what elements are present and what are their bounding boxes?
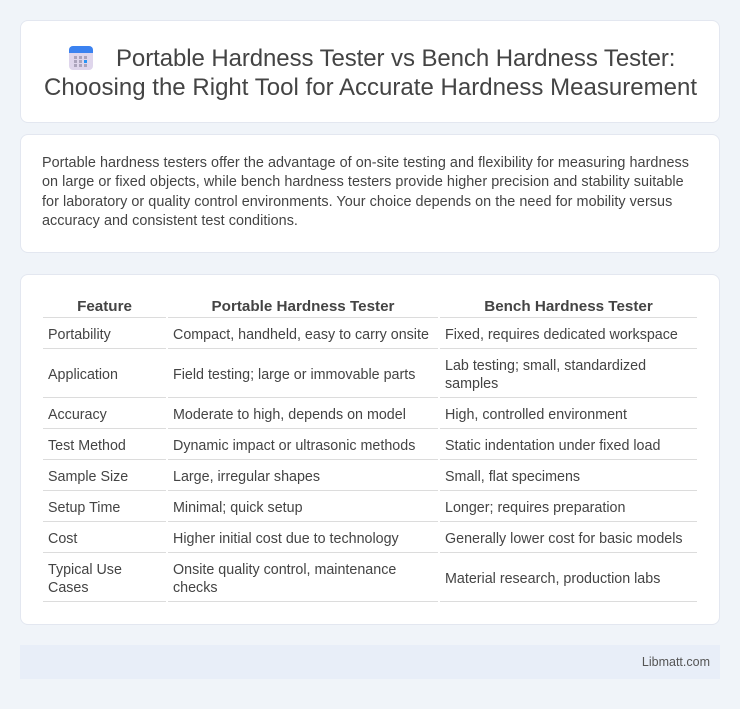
heading: Portable Hardness Tester vs Bench Hardness Tester: [116,45,675,72]
footer source text: Libmatt.com [642,655,710,669]
table: feature comparison: Sample Size [48,469,128,485]
table: feature comparison: Portability [48,327,111,343]
table: feature comparison: Application [48,367,118,383]
table: feature comparison: Cost [48,531,77,547]
table: feature comparison: Small, flat specimens [445,469,580,485]
table: feature comparison: Lab testing; small, standardized [445,358,646,374]
table: feature comparison: Minimal; quick setup [173,500,303,516]
table: feature comparison: Large, irregular shapes [173,469,320,485]
table: feature comparison: Dynamic impact or ultrasonic methods [173,438,415,454]
icon: calendar [69,46,93,70]
table: feature comparison: Feature [77,298,132,314]
table: feature comparison: Onsite quality control, maintenance [173,562,396,578]
text block: summary: Portable hardness testers offer the advantage of on-site testing and flexibility for measuring hardness [42,155,689,171]
footer bar [20,645,720,679]
table: feature comparison: Generally lower cost for basic models [445,531,683,547]
table: feature comparison: Compact, handheld, easy to carry onsite [173,327,429,343]
heading: Choosing the Right Tool for Accurate Hardness Measurement [44,74,697,101]
text block: summary: on large or fixed objects, while bench hardness testers provide higher precision and stability suitable [42,174,684,190]
table: feature comparison: Moderate to high, depends on model [173,407,406,423]
table: feature comparison: Accuracy [48,407,107,423]
table: feature comparison: Test Method [48,438,126,454]
table: feature comparison: Longer; requires preparation [445,500,625,516]
text block: summary: for laboratory or quality control environments. Your choice depends on the need for mobility versus [42,194,672,210]
heading [44,45,697,101]
table: feature comparison: Cases [48,580,89,596]
table: feature comparison: Higher initial cost due to technology [173,531,399,547]
table: feature comparison: Setup Time [48,500,120,516]
table: feature comparison: Material research, production labs [445,571,660,587]
text block: summary [42,155,689,229]
text block: summary: accuracy and consistent test conditions. [42,213,298,229]
table: feature comparison: Portable Hardness Tester [212,298,394,314]
table: feature comparison: samples [445,376,498,392]
table: feature comparison: checks [173,580,218,596]
table: feature comparison: Field testing; large or immovable parts [173,367,415,383]
table: feature comparison: Bench Hardness Tester [484,298,653,314]
table: feature comparison: Fixed, requires dedicated workspace [445,327,678,343]
table: feature comparison: Static indentation under fixed load [445,438,660,454]
panel: comparison table [20,274,720,625]
panel: title card [20,20,720,123]
table: feature comparison: Typical Use [48,562,122,578]
table: feature comparison [43,298,697,602]
table: feature comparison: High, controlled environment [445,407,627,423]
panel: introduction text [20,134,720,253]
